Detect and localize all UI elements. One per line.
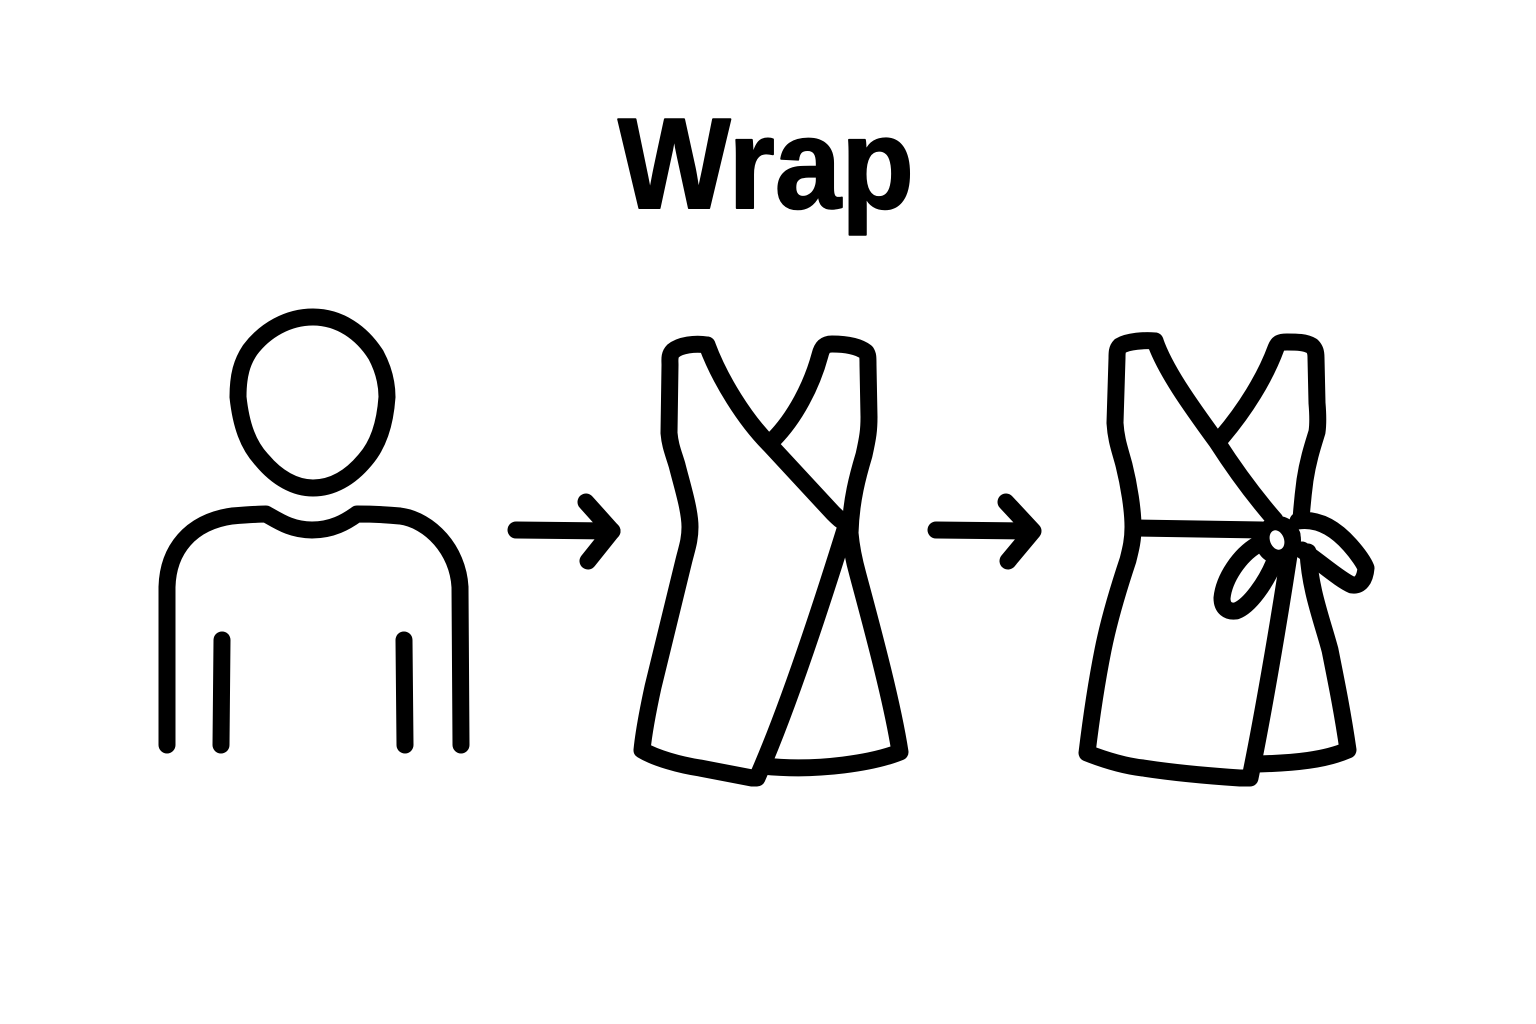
arrow 2 [936, 502, 1033, 561]
garment back panel [763, 344, 900, 768]
person left arm line [221, 640, 222, 745]
person right arm line [404, 640, 405, 745]
bow right loop [1298, 520, 1366, 585]
tied garment neckline and wrap diagonal [1155, 341, 1275, 520]
garment neckline and wrap diagonal [707, 345, 847, 523]
bow knot [1255, 516, 1301, 564]
garment front panel [642, 344, 847, 778]
tied garment front panel [1087, 341, 1292, 778]
tied garment right side and hem [1258, 552, 1348, 764]
arrow 1 [516, 502, 612, 561]
person torso [167, 514, 461, 745]
waist belt [1135, 528, 1262, 530]
title: Wrap [618, 92, 914, 236]
person head [238, 317, 387, 488]
icon: tied wrap garment [1087, 341, 1366, 778]
bow left loop [1222, 545, 1274, 611]
icon: open wrap garment [642, 344, 900, 778]
tied garment back panel [1222, 342, 1318, 520]
icon: person [167, 317, 461, 745]
